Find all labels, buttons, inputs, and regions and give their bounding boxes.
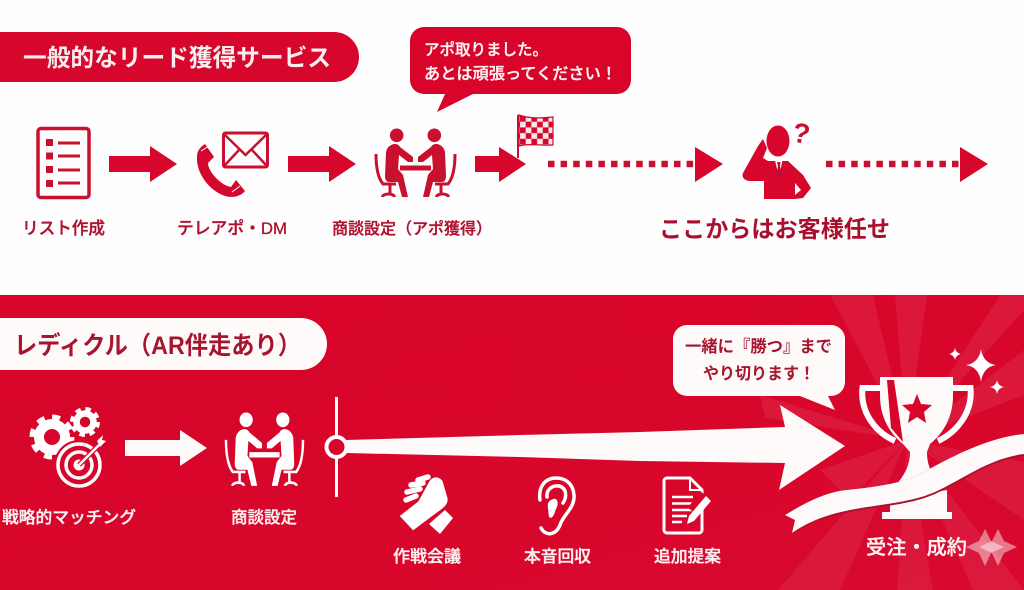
- icon: ear: [540, 478, 574, 534]
- label: strategic matching: 戦略的マッチング: [2, 508, 136, 527]
- dotted arrow: to customer: [548, 147, 723, 182]
- icon: list: [38, 128, 89, 198]
- arrow: list to telemarketing: [109, 146, 177, 182]
- label: additional proposal: 追加提案: [654, 547, 722, 566]
- label: honest feedback collection: 本音回収: [524, 547, 592, 566]
- icon: arm-wrestling handshake: [399, 477, 453, 534]
- icon: checkered goal flag: [518, 115, 553, 158]
- speech bubble: until we win together: やり切ります！: [703, 364, 815, 383]
- label: strategy meeting: 作戦会議: [393, 547, 462, 566]
- speech bubble: appointment acquired: アポ取りました。: [424, 41, 548, 59]
- icon: gears and target: [32, 409, 106, 490]
- big arrow: AR support journey: [346, 405, 845, 490]
- speech bubble: until we win together: [673, 325, 845, 410]
- speech bubble: appointment acquired: [410, 27, 631, 112]
- sparkle stars: [949, 348, 1004, 394]
- arrow: matching to meeting: [125, 430, 207, 466]
- faint sparkle watermark: [966, 529, 1017, 566]
- label: order and contract: 受注・成約: [866, 536, 967, 559]
- speech bubble: appointment acquired: あとは頑張ってください！: [424, 65, 617, 83]
- heading pill: redicle: [0, 318, 327, 370]
- icon: question mark: ?: [790, 117, 812, 150]
- milestone marker: [326, 397, 346, 497]
- panel: general lead services: [0, 27, 988, 242]
- dotted arrow: customer onward: [826, 147, 988, 182]
- panel: redicle with AR support: [0, 295, 1024, 590]
- icon: business meeting: [376, 128, 455, 197]
- icon: trophy: [862, 377, 971, 519]
- icon: business meeting: [226, 413, 303, 486]
- heading pill: redicle: レディクル（AR伴走あり）: [14, 331, 301, 360]
- icon: document and pencil: [664, 478, 711, 533]
- heading pill: general: 一般的なリード獲得サービス: [23, 45, 331, 72]
- label: telemarketing and DM: テレアポ・DM: [177, 219, 287, 238]
- heading pill: general: [0, 32, 359, 82]
- icon: phone and envelope: [197, 133, 268, 197]
- label: meeting set: 商談設定: [231, 508, 297, 527]
- label: meeting set, appointment acquired: 商談設定（アポ獲得）: [332, 219, 492, 238]
- callout: left to customer from here: ここからはお客様任せ: [659, 216, 890, 242]
- icon: confused customer: [742, 117, 812, 199]
- speech bubble: until we win together: 一緒に『勝つ』まで: [685, 337, 832, 356]
- arrow: telemarketing to meeting: [288, 146, 356, 182]
- red background: [0, 295, 1024, 590]
- ribbon: [785, 434, 1024, 534]
- arrow: meeting to goal flag: [475, 147, 526, 182]
- sunburst rays: [760, 295, 1024, 590]
- label: list creation: リスト作成: [22, 219, 105, 238]
